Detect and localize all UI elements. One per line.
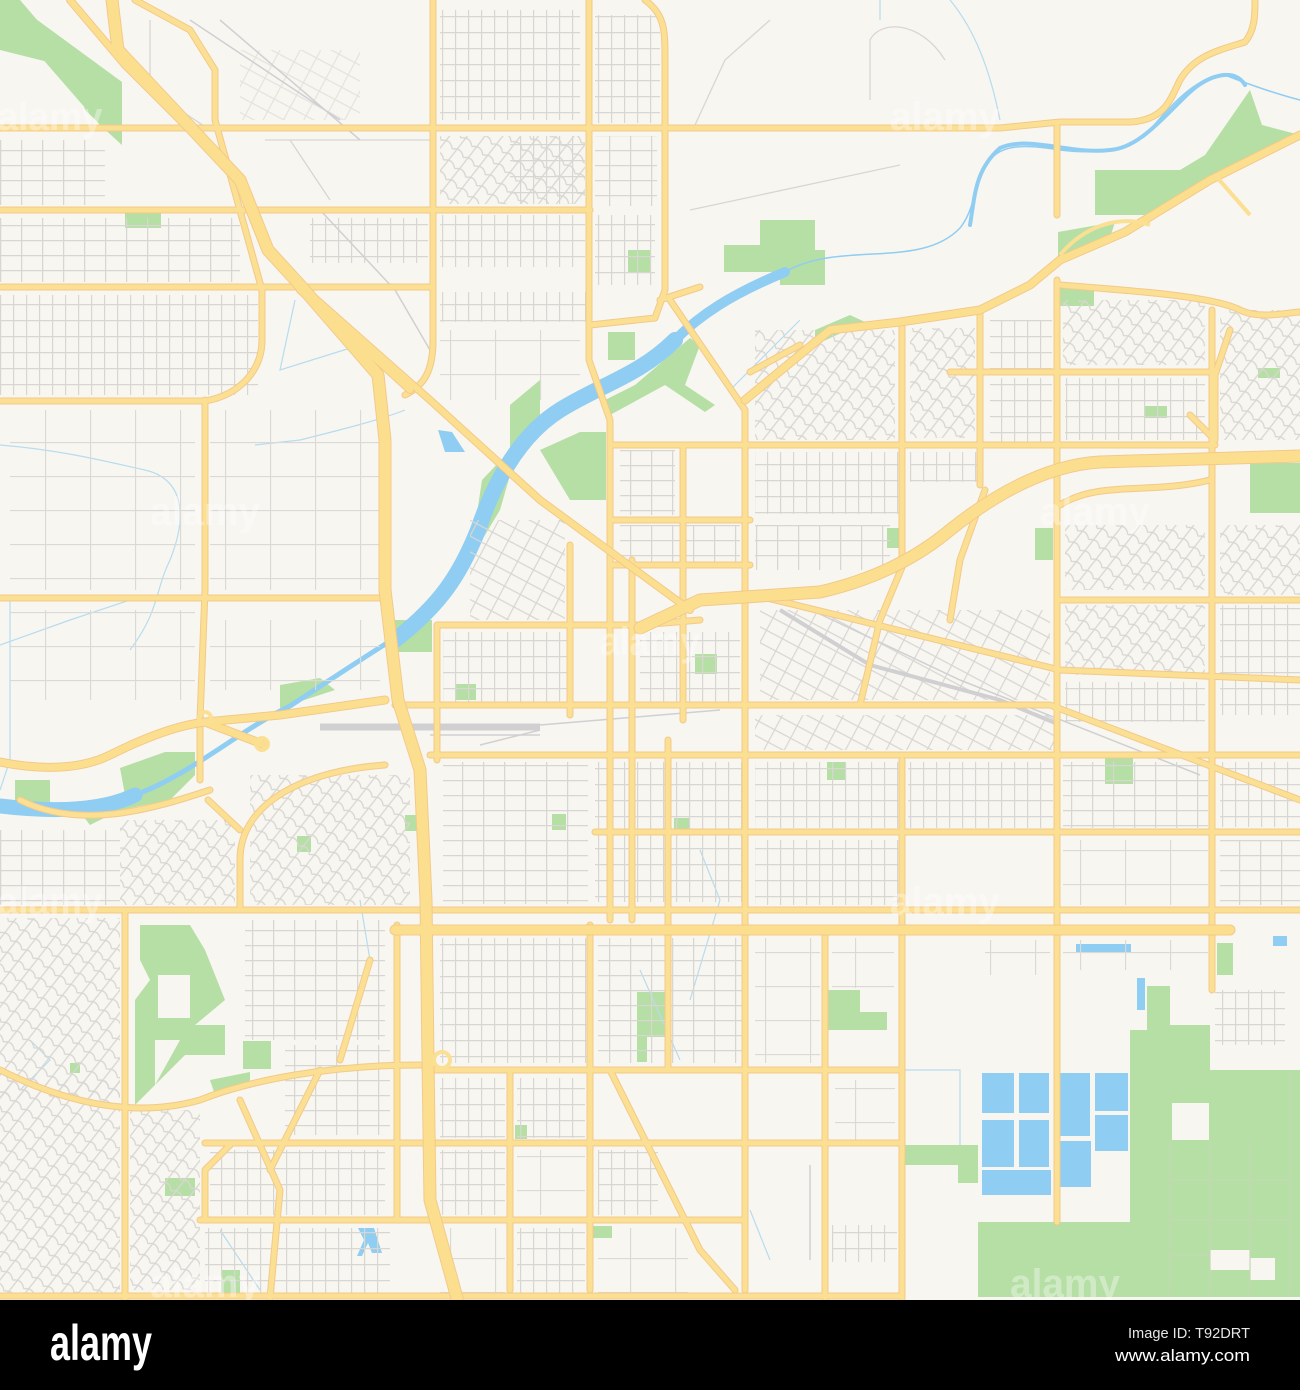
park clearing [1172,1103,1275,1280]
stock image watermarks: alamy [0,95,103,139]
footer bar: Image ID: T92DRT [1128,1325,1250,1342]
stock image watermarks: alamy [1010,1262,1121,1306]
rural lanes [150,20,945,210]
footer bar: www.alamy.com [1114,1346,1250,1365]
interchange loops [199,175,1250,1068]
stock image watermarks: alamy [0,880,103,924]
lakes and ponds [357,430,1287,1256]
stock image watermarks: alamy [1040,490,1151,534]
footer bar: alamy [50,1315,152,1371]
farm field lines [1170,1070,1290,1295]
stock image watermarks: alamy [150,490,261,534]
footer bar [0,1300,1300,1390]
stock image watermarks: alamy [150,1262,261,1306]
canals and creeks [0,0,1000,1290]
stock image watermarks: alamy [890,880,1001,924]
stock image watermarks: alamy [890,95,1001,139]
river [0,75,1300,810]
stock image watermarks [0,95,1151,1306]
stock image watermarks: alamy [600,620,701,664]
railway yards and airport runway [190,20,1200,1260]
